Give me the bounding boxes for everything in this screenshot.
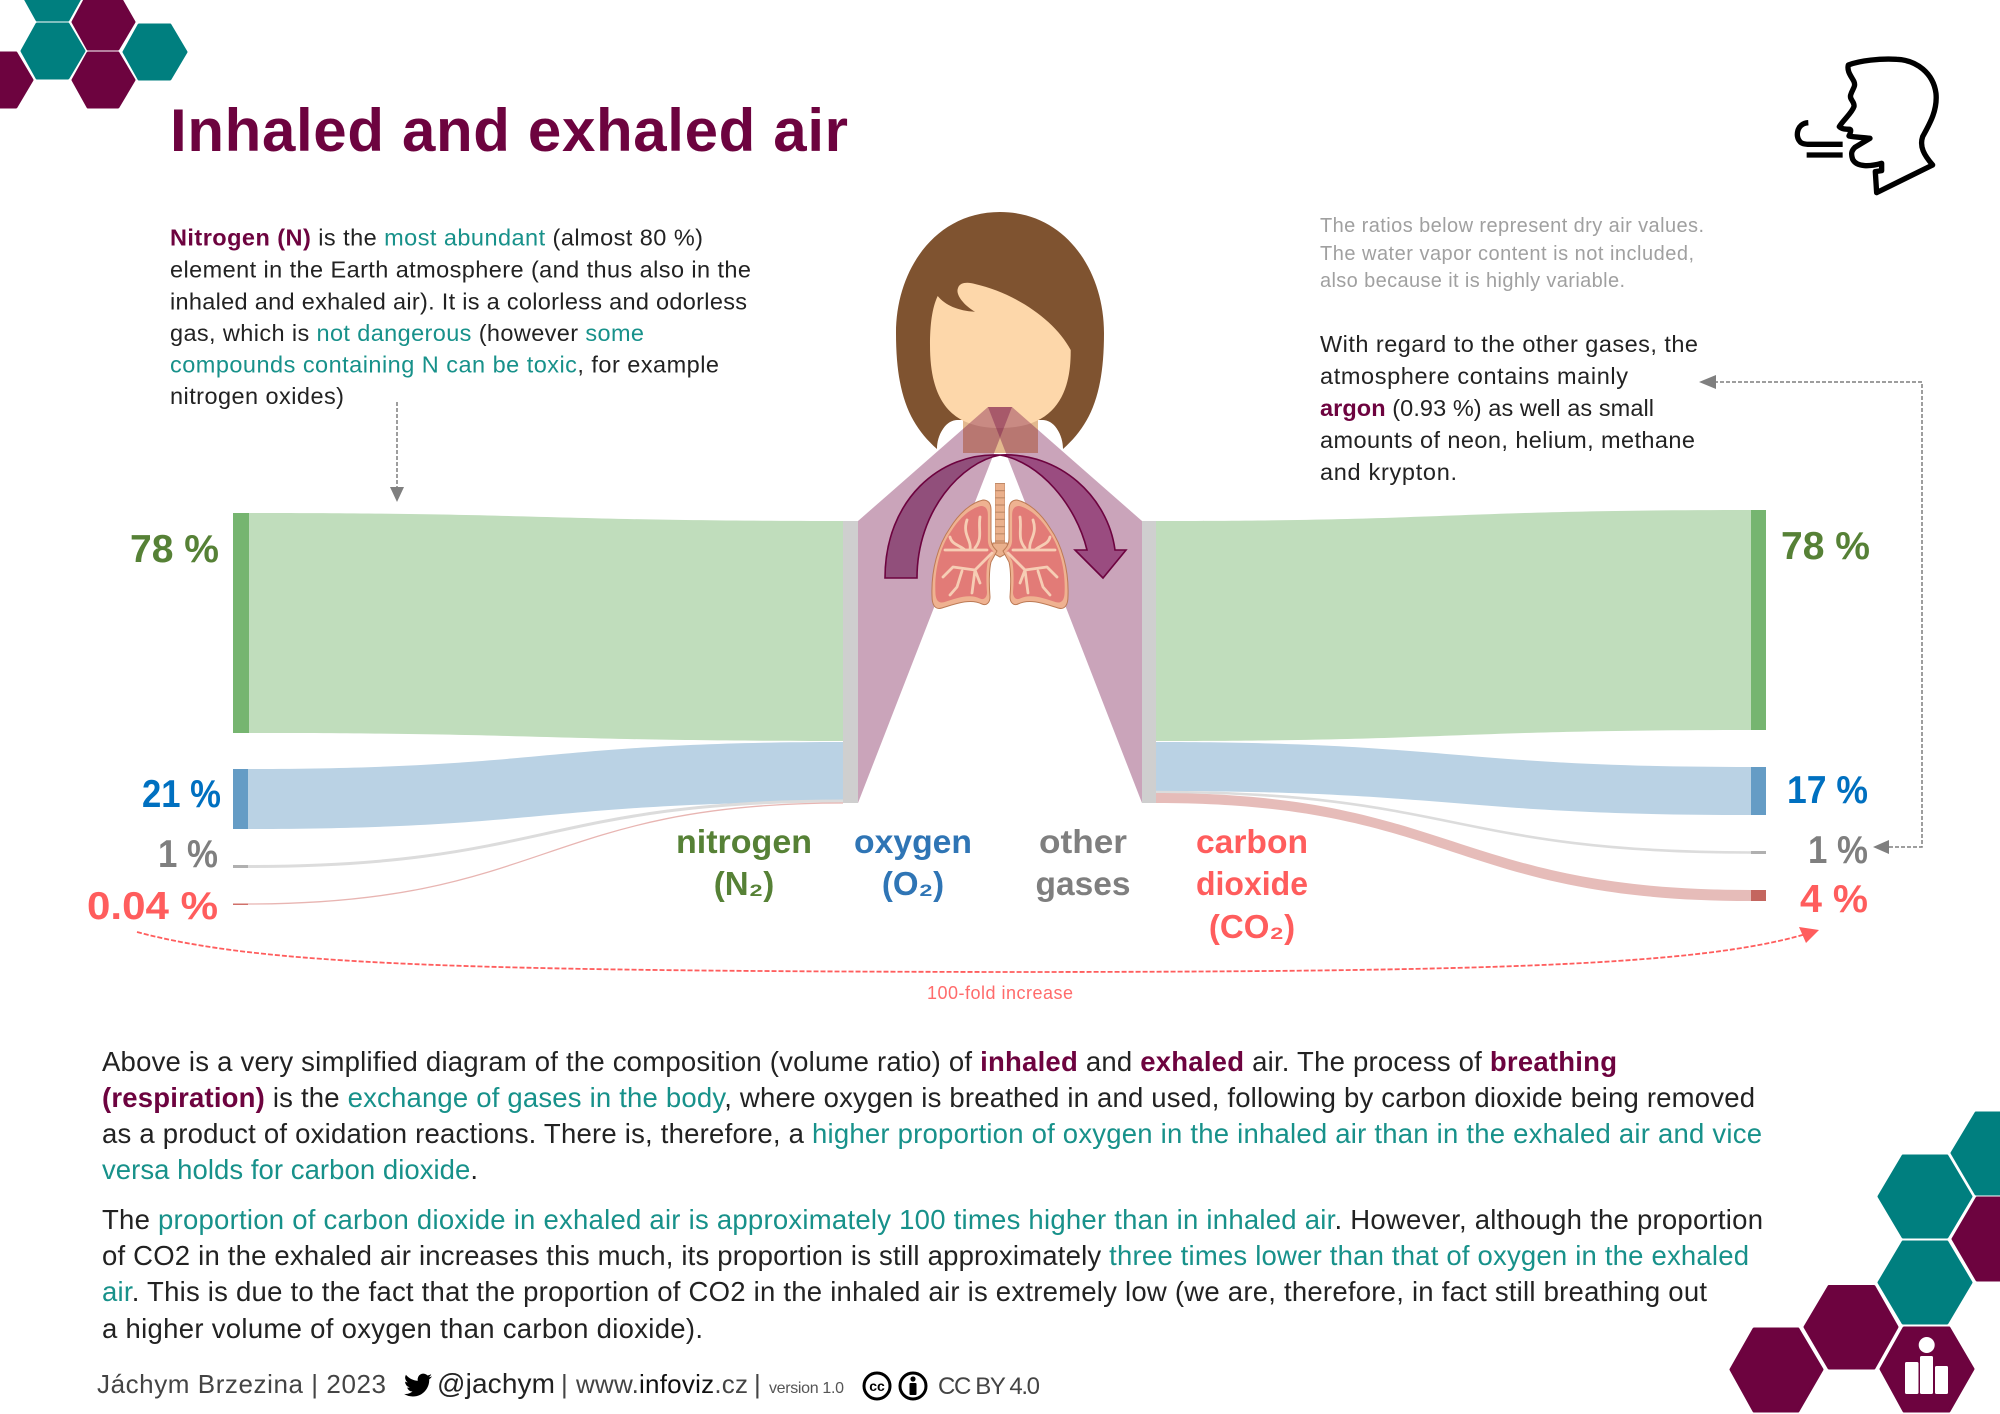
text block: dry air note: The water vapor content is not included,: [1320, 243, 1694, 265]
sankey: exhaled flows: [843, 510, 1766, 901]
figure: person head: [896, 212, 1104, 453]
label: other gases: other: [1039, 823, 1127, 860]
icon: creative commons: [864, 1373, 926, 1399]
text block: paragraph two: air. This is due to the fact that the proportion of CO2 in the inhaled air is extremely low (we are, therefore, in fact still breathing out: [102, 1276, 1707, 1307]
airway: translucent purple bands: [858, 407, 1142, 803]
label: oxygen: oxygen: [854, 823, 972, 860]
inhaled percentages: 21 %: [142, 773, 221, 816]
footer: handle and website: |: [754, 1369, 761, 1399]
exhaled percentages: 17 %: [1787, 769, 1868, 812]
arrow: 100-fold increase: [137, 927, 1819, 972]
footer: licence: CC BY 4.0: [938, 1373, 1040, 1400]
label: nitrogen: [676, 823, 812, 902]
annotation: 100-fold increase: 100-fold increase: [927, 983, 1073, 1003]
text block: dry air note: [1320, 215, 1704, 292]
label: carbon dioxide: [1196, 823, 1308, 945]
icon: twitter bird: [404, 1374, 432, 1396]
footer: handle and website: @jachym: [437, 1368, 555, 1399]
inhaled percentages: 1 %: [158, 833, 218, 876]
text block: paragraph one: [102, 1046, 1762, 1185]
exhaled percentages: 4 %: [1800, 878, 1868, 921]
decoration: top-left hexagons: [0, 0, 186, 107]
text block: nitrogen note: inhaled and exhaled air). It is a colorless and odorless: [170, 288, 747, 314]
text block: paragraph one: Above is a very simplified diagram of the composition (volume ratio) of inhaled and exhaled air. The process of breathing: [102, 1046, 1617, 1077]
inhaled percentages: 78 %: [130, 528, 219, 571]
footer: handle and website: |: [561, 1369, 568, 1399]
text block: nitrogen note: nitrogen oxides): [170, 383, 344, 409]
arrow: inhale to exhale: [885, 455, 1126, 578]
text block: paragraph one: (respiration) is the exchange of gases in the body, where oxygen is breathed in and used, following by carbon dioxide being removed: [102, 1082, 1755, 1113]
text block: nitrogen note: compounds containing N can be toxic, for example: [170, 352, 719, 378]
text block: other gases note: atmosphere contains mainly: [1320, 363, 1628, 389]
text block: paragraph one: as a product of oxidation reactions. There is, therefore, a higher proportion of oxygen in the inhaled air than in the exhaled air and vice: [102, 1118, 1762, 1149]
label: carbon dioxide: (CO₂): [1209, 908, 1295, 945]
footer: handle and website: version 1.0: [769, 1380, 844, 1397]
sankey: inhaled flows: [233, 513, 843, 905]
text block: nitrogen note: gas, which is not dangerous (however some: [170, 320, 644, 346]
label: carbon dioxide: carbon: [1196, 823, 1308, 860]
icon: infoviz logo: [1905, 1337, 1948, 1394]
text block: other gases note: [1320, 331, 1698, 485]
text block: dry air note: also because it is highly variable.: [1320, 270, 1625, 292]
text block: dry air note: The ratios below represent dry air values.: [1320, 215, 1704, 237]
text block: nitrogen note: element in the Earth atmosphere (and thus also in the: [170, 256, 751, 282]
text block: other gases note: argon (0.93 %) as well as small: [1320, 395, 1654, 421]
label: nitrogen: (N₂): [714, 865, 774, 902]
inhaled percentages: 0.04 %: [87, 885, 218, 928]
icon: creative commons: cc: [869, 1378, 885, 1394]
label: other gases: gases: [1036, 865, 1130, 902]
text block: nitrogen note: Nitrogen (N) is the most abundant (almost 80 %): [170, 224, 703, 250]
exhaled percentages: 78 %: [1781, 525, 1870, 568]
footer: author: Jáchym Brzezina | 2023: [97, 1369, 386, 1399]
icon: lungs: [932, 483, 1068, 608]
inhaled percentages: [87, 528, 221, 928]
text block: other gases note: and krypton.: [1320, 459, 1457, 485]
footer: handle and website: [437, 1368, 844, 1399]
exhaled percentages: 1 %: [1808, 829, 1868, 872]
icon: head exhaling: [1797, 59, 1936, 193]
label: oxygen: (O₂): [882, 865, 944, 902]
arrow: nitrogen note to inhaled bar: [390, 402, 404, 502]
text block: paragraph two: of CO2 in the exhaled air increases this much, its proportion is still approximately three times lower than that of oxygen in the exhaled: [102, 1240, 1749, 1271]
text block: other gases note: amounts of neon, helium, methane: [1320, 427, 1695, 453]
text block: paragraph two: [102, 1204, 1763, 1344]
text block: paragraph two: a higher volume of oxygen than carbon dioxide).: [102, 1313, 703, 1344]
arrow: other gases note to 1 %: [1699, 375, 1922, 854]
text block: other gases note: With regard to the other gases, the: [1320, 331, 1698, 357]
text block: nitrogen note: [170, 224, 751, 409]
label: other gases: [1036, 823, 1130, 902]
text block: paragraph one: versa holds for carbon dioxide.: [102, 1154, 478, 1185]
title: Inhaled and exhaled air: [170, 97, 848, 164]
label: nitrogen: nitrogen: [676, 823, 812, 860]
footer: handle and website: www.infoviz.cz: [575, 1369, 748, 1399]
text block: paragraph two: The proportion of carbon dioxide in exhaled air is approximately 100 times higher than in inhaled air. However, although the proportion: [102, 1204, 1763, 1235]
decoration: bottom-right hexagons with logo: [1731, 1113, 2000, 1411]
exhaled percentages: [1781, 525, 1870, 921]
label: oxygen: [854, 823, 972, 902]
label: carbon dioxide: dioxide: [1196, 865, 1308, 902]
